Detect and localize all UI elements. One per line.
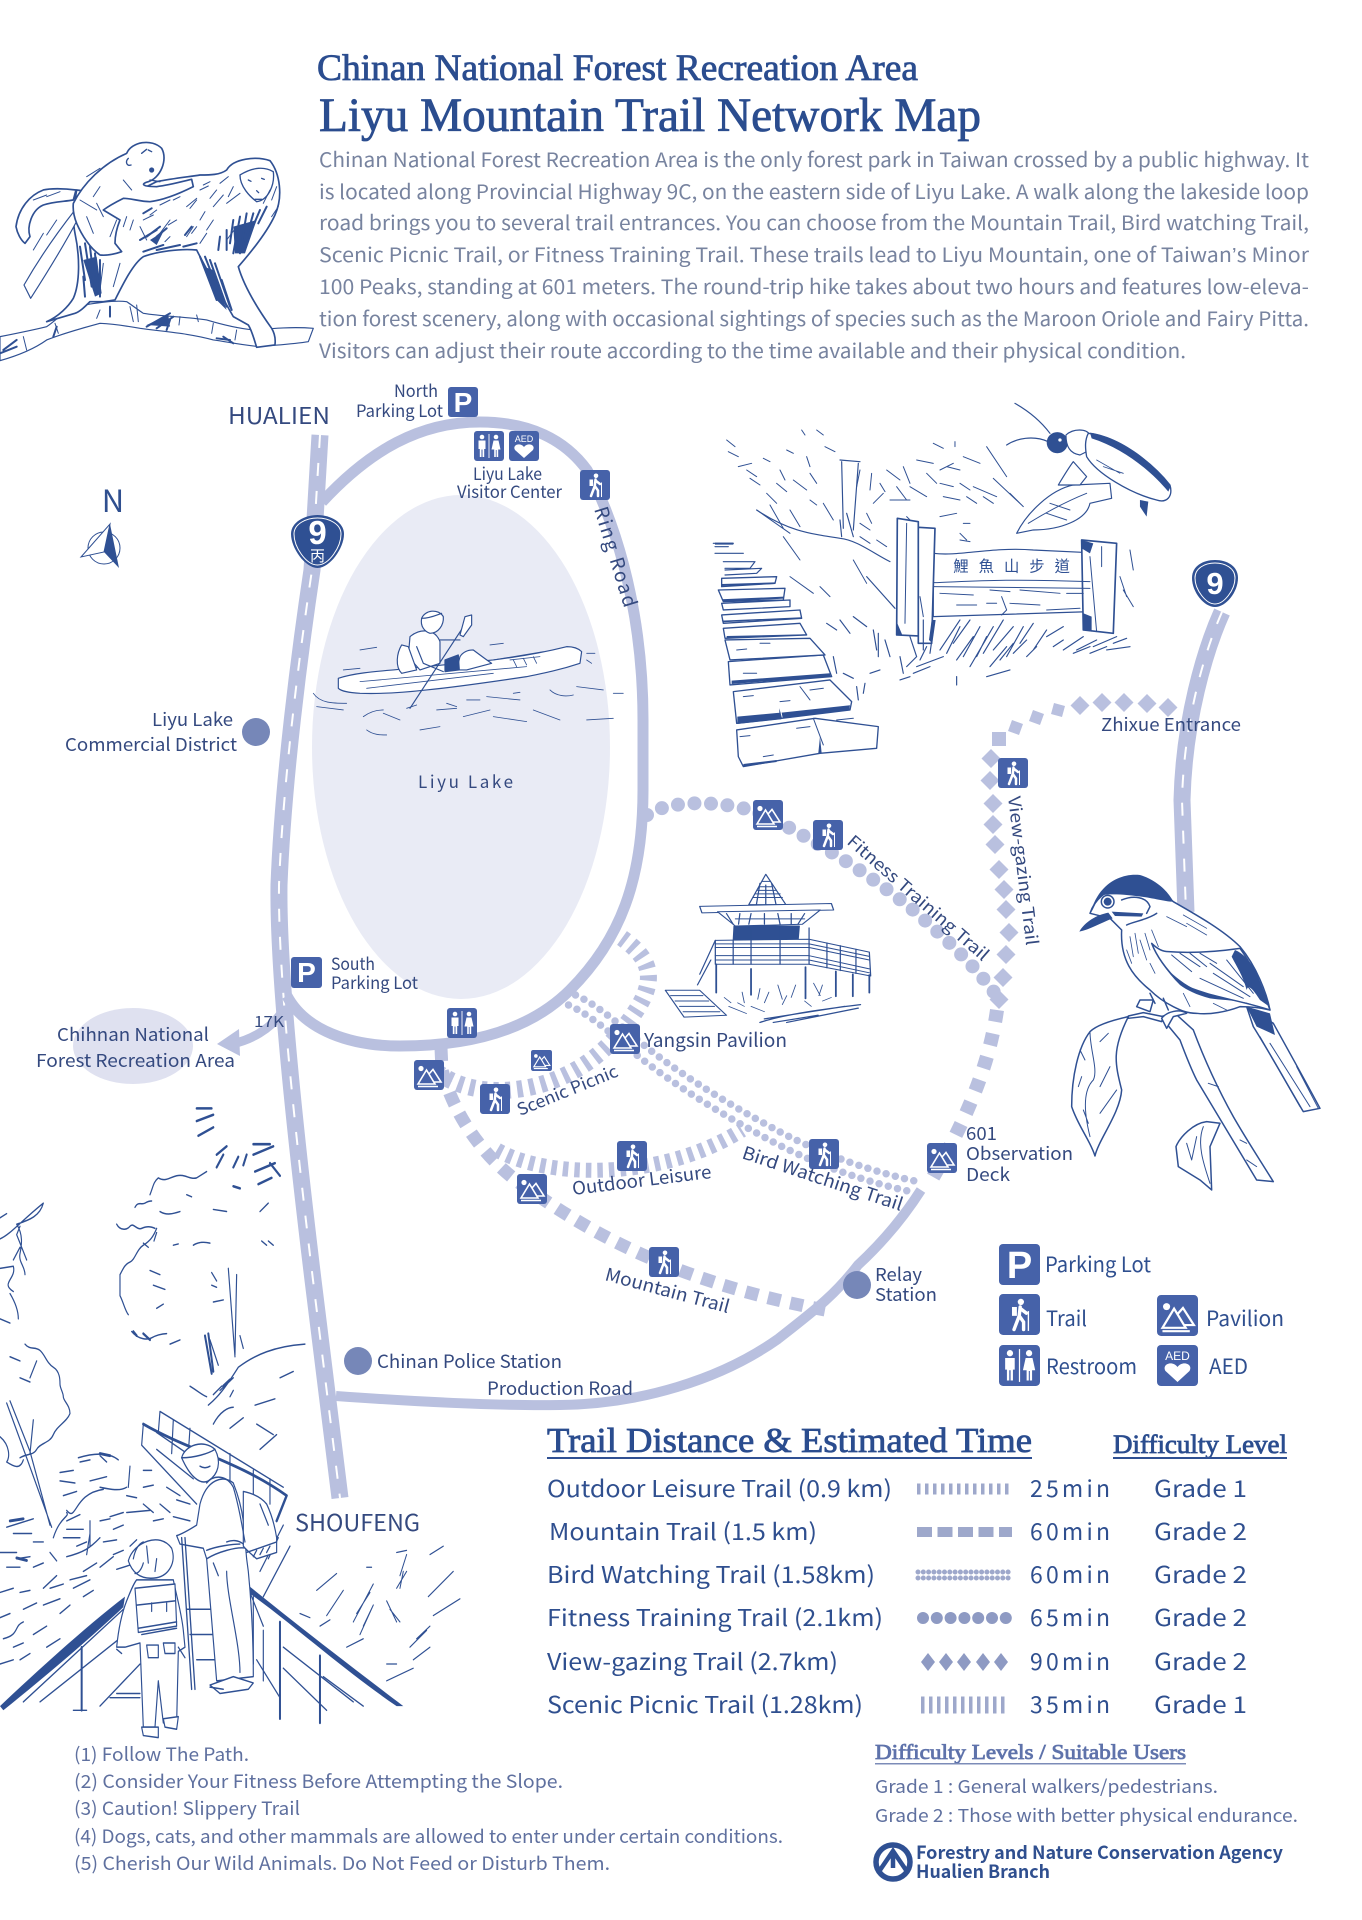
intro text block: Scenic Picnic Trail, or Fitness Training Trail. These trails lead to Liyu Mountain, one of Taiwan ’s Minor: [319, 239, 1309, 268]
trail: outdoor leisure ticks: [497, 1130, 742, 1170]
icon: bird watching trail: [809, 1139, 839, 1169]
map labels: Chihnan National: [57, 1021, 209, 1047]
north compass: [81, 476, 124, 568]
table row: mountain: Mountain Trail (1.5 km): [549, 1513, 817, 1547]
map labels: Ring Road: [588, 503, 644, 610]
trail: mountain squares: [441, 1048, 825, 1310]
illustration: firefly, sign and steps: [713, 403, 1171, 767]
map legend: Pavilion: [1206, 1303, 1284, 1333]
table row: bird watching: Grade 2: [1154, 1556, 1247, 1590]
illustration: pavilion: [665, 874, 871, 1022]
road: ring road: [287, 422, 643, 1046]
icon: outdoor trail: [617, 1141, 647, 1171]
map labels: Outdoor Leisure: [571, 1158, 713, 1201]
table row: outdoor leisure: [547, 1470, 1247, 1504]
map labels: HUALIEN: [228, 397, 330, 431]
map labels: Zhixue Entrance: [1101, 711, 1241, 737]
table row: outdoor leisure: Outdoor Leisure Trail (0.9 km): [547, 1470, 892, 1504]
table row: scenic picnic: 35min: [1030, 1686, 1110, 1720]
intro text block: 100 Peaks, standing at 601 meters. The round-trip hike takes about two hours and features low-eleva-: [319, 271, 1309, 300]
intro text block: [319, 144, 1309, 364]
map labels: [36, 377, 1241, 1538]
agency name: Forestry and Nature Conservation Agency: [916, 1839, 1284, 1865]
intro text block: is located along Provincial Highway 9C, on the eastern side of Liyu Lake. A walk along the lakeside loop: [319, 176, 1309, 205]
points of interest: police station: [344, 1347, 372, 1375]
table heading: difficulty level: Difficulty Level: [1113, 1430, 1287, 1459]
illustration: maroon oriole bird: [1072, 875, 1320, 1190]
icon: mountain trail: [649, 1247, 679, 1277]
trail: bird watching double dots: [568, 995, 920, 1192]
icon: ring road trail: [580, 470, 610, 500]
icon: fitness trail: [813, 820, 843, 850]
map legend: Parking Lot: [1045, 1249, 1151, 1279]
map labels: Fitness Training Trail: [843, 828, 996, 966]
map labels: Bird Watching Trail: [739, 1139, 907, 1217]
map labels: Deck: [966, 1161, 1010, 1187]
map labels: Scenic Picnic: [513, 1057, 621, 1121]
safety notes: [74, 1741, 783, 1876]
map labels: View-gazing Trail: [1003, 795, 1046, 947]
icon: small pavilion: [531, 1050, 552, 1071]
map labels: Production Road: [487, 1375, 633, 1401]
title: Liyu Mountain Trail Network Map: [319, 89, 981, 142]
lake: [312, 495, 610, 999]
title: [317, 48, 981, 142]
table row: fitness training: 65min: [1030, 1599, 1110, 1633]
table row: view-gazing: View-gazing Trail (2.7km): [547, 1643, 838, 1677]
road: highway 9C left: [279, 435, 340, 1498]
table row: view-gazing: Grade 2: [1154, 1643, 1247, 1677]
safety notes: (2) Consider Your Fitness Before Attempting the Slope.: [74, 1768, 563, 1794]
icon: south restroom: [447, 1008, 477, 1038]
map legend: AED: [1209, 1351, 1248, 1381]
map labels: Relay: [875, 1261, 923, 1287]
points of interest: commercial district: [242, 718, 270, 746]
highway shield 9: 9: [1206, 566, 1224, 601]
arrow to Chihnan National Forest Recreation Area: [217, 1012, 282, 1056]
intro text block: Visitors can adjust their route according to the time available and their physical condition.: [319, 335, 1186, 364]
map labels: 17K: [254, 1011, 284, 1032]
safety notes: (4) Dogs, cats, and other mammals are allowed to enter under certain conditions.: [74, 1823, 783, 1849]
illustration: firefly, sign and steps: 鯉魚山步道: [953, 555, 1080, 577]
table row: bird watching: 60min: [1030, 1556, 1110, 1590]
highway shield 9C: [291, 514, 344, 568]
map legend: Trail: [1046, 1303, 1087, 1333]
table row: mountain: Grade 2: [1154, 1513, 1247, 1547]
table row: view-gazing: [547, 1643, 1247, 1677]
icon: pavilion west: [414, 1060, 444, 1090]
table row: mountain: 60min: [1030, 1513, 1110, 1547]
map legend: P: [1007, 1245, 1032, 1287]
map labels: Parking Lot: [356, 397, 444, 422]
intro text block: Chinan National Forest Recreation Area is the only forest park in Taiwan crossed by a public highway. It: [319, 144, 1309, 173]
map labels: Chinan Police Station: [377, 1348, 562, 1374]
table row: outdoor leisure: Grade 1: [1154, 1470, 1247, 1504]
intro text block: road brings you to several trail entrances. You can choose from the Mountain Trail, Bird watching Trail,: [319, 207, 1309, 236]
table row: outdoor leisure: 25min: [1030, 1470, 1110, 1504]
agency name: [916, 1839, 1284, 1884]
area ellipse: [73, 1008, 193, 1084]
icon: south parking: [291, 957, 322, 988]
icon: pavilion south: [517, 1174, 547, 1204]
table row: mountain: [549, 1513, 1247, 1547]
map labels: SHOUFENG: [295, 1504, 420, 1538]
road: highway right: [1182, 612, 1222, 912]
icon: fitness pavilion: [753, 800, 783, 830]
map labels: Liyu Lake: [152, 706, 233, 732]
highway shield 9C: 9: [308, 514, 327, 551]
trail: view-gazing diamonds: [980, 693, 1178, 1009]
highway shield 9C: 丙: [310, 545, 325, 566]
map labels: Station: [875, 1281, 937, 1307]
map labels: Commercial District: [65, 731, 237, 757]
table row: fitness training: Grade 2: [1154, 1599, 1247, 1633]
table row: fitness training: Fitness Training Trail (2.1km): [547, 1599, 883, 1633]
points of interest: relay station: [843, 1271, 871, 1299]
icon: north parking: P: [454, 387, 472, 418]
agency logo: [876, 1845, 910, 1879]
icon: visitor center AED: [509, 431, 539, 461]
table row: bird watching: Bird Watching Trail (1.58km): [547, 1556, 875, 1590]
illustration: forest trees and hikers on bridge: [0, 1108, 460, 1738]
north compass: N: [102, 476, 124, 521]
map labels: South: [331, 950, 375, 975]
icon: visitor center restroom: [474, 431, 504, 461]
map labels: Forest Recreation Area: [36, 1047, 235, 1073]
map legend: AED: [1165, 1349, 1190, 1363]
icon: view-gazing trail: [998, 758, 1028, 788]
map legend: [999, 1244, 1284, 1386]
road: production road: [336, 1190, 921, 1405]
icon: north parking: [448, 387, 478, 418]
icon: Yangsin pavilion: [610, 1024, 640, 1054]
map labels: Liyu Lake: [418, 768, 513, 793]
trail: scenic picnic ticks: [437, 938, 648, 1090]
table heading: trail distance and estimated time: Trail Distance & Estimated Time: [547, 1421, 1032, 1460]
map labels: Liyu Lake: [473, 460, 542, 485]
difficulty levels key: Grade 1 : General walkers/pedestrians.: [875, 1773, 1218, 1799]
safety notes: (1) Follow The Path.: [74, 1741, 249, 1767]
map labels: Yangsin Pavilion: [643, 1026, 787, 1053]
safety notes: (5) Cherish Our Wild Animals. Do Not Feed or Disturb Them.: [74, 1850, 610, 1876]
trail: fitness training: [647, 803, 999, 999]
icon: south parking: P: [297, 957, 316, 988]
table row: bird watching: [547, 1556, 1247, 1590]
safety notes: (3) Caution! Slippery Trail: [74, 1795, 300, 1821]
icon: visitor center AED: AED: [515, 434, 534, 444]
title: Chinan National Forest Recreation Area: [317, 48, 918, 89]
map labels: Visitor Center: [457, 478, 562, 503]
table row: scenic picnic: [547, 1686, 1247, 1720]
illustration: macaques on branch: [0, 142, 313, 361]
difficulty levels key: Grade 2 : Those with better physical endurance.: [875, 1802, 1298, 1828]
trail: lower dashes to observation deck: [928, 1010, 997, 1186]
table row: fitness training: [547, 1599, 1247, 1633]
table row: view-gazing: 90min: [1030, 1643, 1110, 1677]
highway shield 9: [1192, 560, 1238, 607]
illustration: kayaker: [313, 611, 623, 735]
table row: scenic picnic: Scenic Picnic Trail (1.28km): [547, 1686, 863, 1720]
difficulty levels key: [875, 1740, 1298, 1828]
map labels: 601: [966, 1120, 997, 1146]
map labels: Mountain Trail: [602, 1261, 733, 1319]
intro text block: tion forest scenery, along with occasional sightings of species such as the Maroon Oriole and Fairy Pitta.: [319, 303, 1309, 332]
map legend: Restroom: [1046, 1351, 1137, 1381]
map labels: North: [394, 377, 438, 402]
map labels: Observation: [966, 1140, 1073, 1166]
table row: scenic picnic: Grade 1: [1154, 1686, 1247, 1720]
agency name: Hualien Branch: [916, 1858, 1050, 1884]
icon: scenic trail: [480, 1084, 510, 1114]
difficulty levels key: Difficulty Levels / Suitable Users: [875, 1740, 1186, 1764]
map labels: Parking Lot: [331, 969, 419, 994]
icon: observation deck: [927, 1143, 957, 1173]
